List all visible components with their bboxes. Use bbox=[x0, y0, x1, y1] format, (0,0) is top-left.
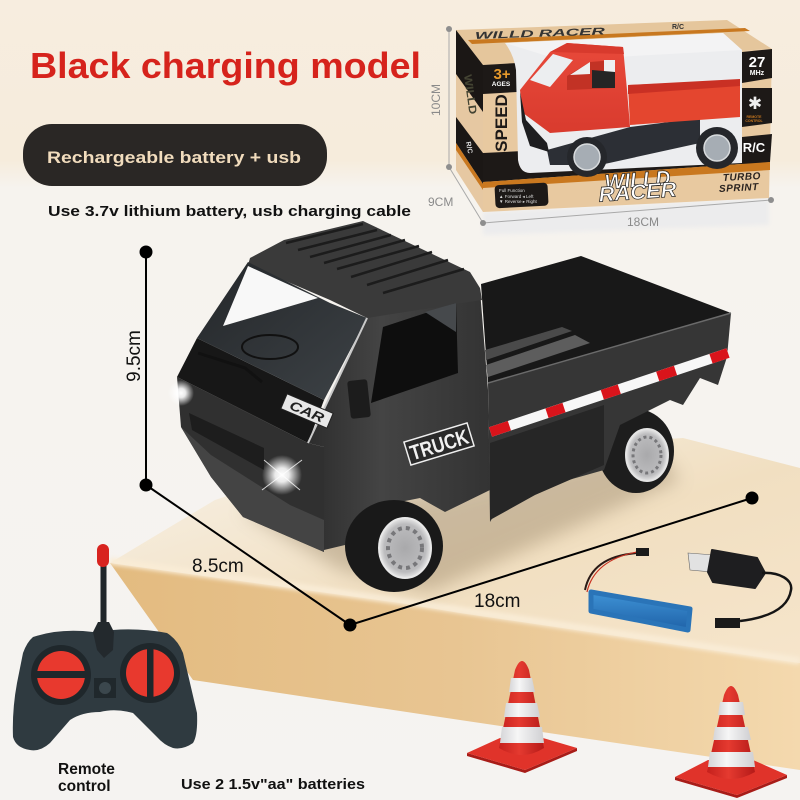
box left side bbox=[456, 30, 483, 212]
box labels: REMOTE bbox=[747, 115, 762, 119]
battery type pill bbox=[23, 124, 327, 186]
box labels: RACER bbox=[598, 178, 678, 207]
box left side: R/C bbox=[464, 141, 473, 154]
red truck bed bbox=[628, 80, 740, 125]
remote battery note: Use 2 1.5v"aa" batteries bbox=[181, 776, 365, 793]
box front bbox=[483, 49, 772, 212]
box labels bbox=[492, 54, 766, 208]
bumper bbox=[181, 427, 324, 552]
box dimension lines bbox=[446, 26, 774, 226]
box orange stripe bbox=[483, 162, 770, 188]
front wheel bbox=[345, 500, 443, 592]
box labels: 3+ bbox=[493, 66, 511, 83]
box labels: SPRINT bbox=[719, 182, 759, 195]
box labels: ▼ Reverse ▸ Right bbox=[499, 199, 537, 204]
right dial bbox=[120, 643, 180, 703]
box reflection bbox=[483, 198, 769, 235]
height dimension: 9.5cm bbox=[124, 330, 145, 382]
width and length dimensions: 18cm bbox=[474, 591, 520, 612]
rear wheel bbox=[598, 409, 674, 493]
box dimension labels: 18CM bbox=[627, 215, 659, 229]
reflective strip bbox=[490, 353, 728, 432]
box dimension labels: 10CM bbox=[429, 84, 443, 116]
TRUCK sticker: TRUCK bbox=[407, 426, 471, 465]
box labels: CONTROL bbox=[745, 119, 764, 123]
traffic cone left bbox=[467, 661, 577, 773]
remote label bbox=[58, 761, 115, 795]
antenna bbox=[100, 566, 106, 624]
traffic cone right bbox=[675, 686, 787, 798]
battery connector bbox=[636, 548, 649, 556]
remote body bbox=[13, 629, 197, 750]
usb body bbox=[708, 550, 765, 588]
title: Black charging model bbox=[30, 45, 421, 86]
box labels: Full Function bbox=[499, 188, 525, 193]
platform bbox=[110, 438, 800, 770]
truck deck bbox=[481, 256, 731, 383]
battery type pill: Rechargeable battery + usb bbox=[47, 148, 301, 167]
headlights bbox=[168, 380, 302, 495]
usb connector bbox=[715, 618, 740, 628]
box top lid: R/C bbox=[672, 24, 684, 31]
USB charging cable bbox=[688, 550, 791, 628]
grille bbox=[189, 413, 264, 470]
center button bbox=[94, 678, 116, 698]
red truck side window bbox=[567, 60, 615, 90]
box dimension labels bbox=[428, 84, 659, 229]
antenna tip bbox=[97, 544, 109, 567]
battery bbox=[585, 548, 690, 630]
cab side bbox=[308, 275, 490, 550]
red truck in box bbox=[520, 43, 740, 177]
box labels: WILLD bbox=[604, 167, 671, 194]
roof ribs bbox=[286, 224, 464, 293]
battery cell bbox=[591, 592, 690, 630]
windshield bbox=[197, 262, 367, 400]
box labels: ▲ Forward ◂ Left bbox=[499, 194, 534, 199]
box left side: WILLD bbox=[461, 74, 478, 115]
CAR sticker bbox=[281, 394, 333, 428]
width and length dimensions: 8.5cm bbox=[192, 556, 244, 577]
box labels: AGES bbox=[492, 81, 511, 88]
box window bbox=[505, 33, 742, 173]
truck bed side bbox=[488, 313, 731, 522]
product box bbox=[428, 20, 774, 235]
usb cable bbox=[740, 573, 791, 621]
width and length dimensions bbox=[146, 485, 758, 632]
box labels: MHz bbox=[750, 70, 765, 77]
hood bbox=[177, 338, 324, 443]
height dimension bbox=[124, 246, 152, 492]
box labels: 27 bbox=[749, 54, 765, 71]
box top lid: WILLD RACER bbox=[475, 26, 606, 42]
CAR sticker: CAR bbox=[287, 398, 327, 426]
left dial bbox=[31, 645, 91, 705]
truck shadow bbox=[240, 440, 680, 592]
box labels: SPEED bbox=[492, 94, 511, 152]
red truck wheels bbox=[567, 127, 738, 177]
remote label: control bbox=[58, 778, 111, 795]
red truck bumper bbox=[520, 92, 549, 152]
cab front bbox=[177, 377, 324, 552]
red truck cab bbox=[520, 43, 630, 133]
box dimension labels: 9CM bbox=[428, 195, 453, 209]
box front black panels bbox=[483, 49, 772, 182]
remote label: Remote bbox=[58, 761, 115, 778]
battery wire bbox=[585, 553, 637, 590]
red truck chassis bbox=[547, 118, 700, 165]
box top lid bbox=[456, 20, 772, 65]
black truck bbox=[168, 221, 731, 592]
battery note: Use 3.7v lithium battery, usb charging cable bbox=[48, 203, 411, 220]
remote control bbox=[13, 544, 197, 750]
windshield pillar highlight bbox=[308, 318, 367, 443]
box labels: TURBO bbox=[723, 171, 761, 184]
box labels: ✱ bbox=[748, 94, 762, 113]
side window bbox=[371, 303, 458, 403]
antenna base bbox=[93, 622, 114, 658]
box labels: R/C bbox=[743, 140, 766, 155]
roof bbox=[248, 221, 482, 318]
side mirror bbox=[347, 379, 371, 419]
usb plug bbox=[688, 553, 714, 572]
red truck windscreen bbox=[530, 54, 573, 87]
